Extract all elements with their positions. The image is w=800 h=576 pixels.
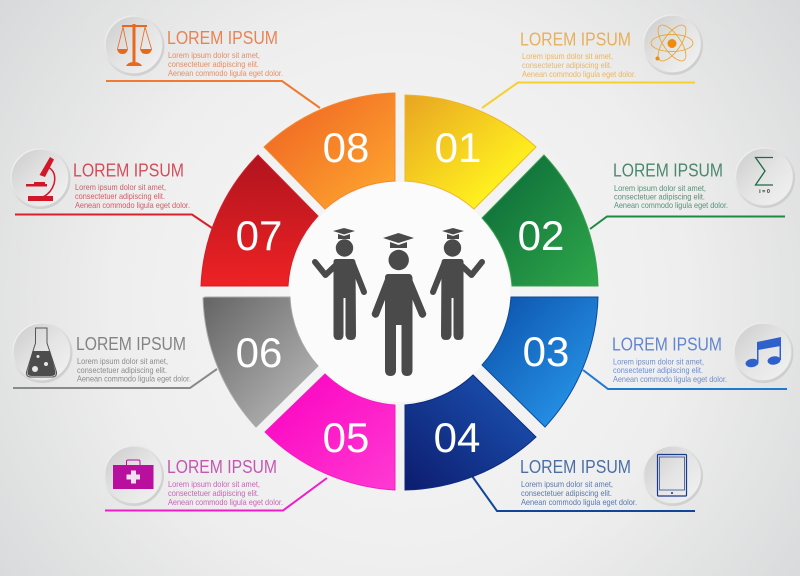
callout 08: consectetuer adipiscing elit. [168,60,259,69]
callout 04: Aenean commodo ligula eget dolor. [521,498,637,507]
icon: music notes [745,337,781,368]
callout 05: Lorem ipsum dolor sit amet, [168,480,260,489]
callout 08 [104,16,283,78]
callout 06 [12,323,191,384]
segment 02 [482,155,598,286]
segment 03: 03 [523,328,569,375]
callout 05 [104,446,283,507]
callout 04 [520,446,703,507]
callout 05: Aenean commodo ligula eget dolor. [168,498,283,507]
segment 06: 06 [236,329,282,376]
icon: atom [651,21,693,65]
callout 02: Lorem ipsum dolor sit amet, [614,184,706,193]
callout 03: Lorem ipsum dolor sit amet, [613,358,704,366]
callout 08: Aenean commodo ligula eget dolor. [168,69,283,78]
segment 04: 04 [434,414,480,461]
center graduate [376,233,422,376]
callout 07 [10,149,190,210]
callout 01: LOREM IPSUM [520,30,631,50]
icon: tablet [658,454,686,496]
callout 04: consectetuer adipiscing elit. [521,489,612,498]
left graduate [315,228,364,340]
callout 02: Aenean commodo ligula eget dolor. [614,201,728,210]
callout 07: consectetuer adipiscing elit. [75,192,165,201]
segment 04 [405,375,536,490]
segment 03 [482,297,598,427]
callout 08: LOREM IPSUM [167,28,278,48]
icon: first aid kit [113,460,154,489]
callout 06: consectetuer adipiscing elit. [77,366,167,375]
icon: scales [117,24,152,66]
icon: graduates [315,228,482,376]
callout 01 [520,15,703,79]
segment 07: 07 [236,212,282,259]
icon: sigma [756,158,773,195]
callout 08: Lorem ipsum dolor sit amet, [168,51,260,60]
callout 02: consectetuer adipiscing elit. [614,192,705,202]
callout 01: consectetuer adipiscing elit. [522,61,612,70]
callout 04: Lorem ipsum dolor sit amet, [521,480,613,489]
callout 02: LOREM IPSUM [613,160,723,180]
icon: flask [26,328,57,377]
callout 07: Aenean commodo ligula eget dolor. [75,201,190,210]
callout 03: LOREM IPSUM [612,334,722,354]
segment 05 [265,374,395,490]
callout 07: Lorem ipsum dolor sit amet, [75,183,166,192]
callout 04: LOREM IPSUM [520,457,631,477]
callout 03 [612,323,794,384]
callout 06: Lorem ipsum dolor sit amet, [77,357,168,366]
segment 07 [201,155,318,286]
callout 05: LOREM IPSUM [167,457,277,477]
callout 07: LOREM IPSUM [73,160,184,180]
segment 06 [203,297,318,427]
segment 01 [405,95,536,209]
segment 01: 01 [435,124,481,171]
center white circle [290,182,510,402]
callout 01: Aenean commodo ligula eget dolor. [522,70,636,79]
callout lines [13,81,787,511]
segment 05: 05 [323,414,369,461]
icon: microscope [26,157,55,201]
callout 06: LOREM IPSUM [76,334,186,354]
callout 01: Lorem ipsum dolor sit amet, [522,52,613,61]
callout 05: consectetuer adipiscing elit. [168,489,259,498]
segment 08 [264,93,395,209]
icon: sigma: i = 0 [759,189,770,195]
callout 02 [613,148,795,210]
segment 02: 02 [518,212,564,259]
callout 03: consectetuer adipiscing elit. [613,366,703,375]
callout 06: Aenean commodo ligula eget dolor. [77,374,191,384]
segment 08: 08 [323,124,369,171]
right graduate [433,228,482,340]
callout 03: Aenean commodo ligula eget dolor. [613,375,727,384]
